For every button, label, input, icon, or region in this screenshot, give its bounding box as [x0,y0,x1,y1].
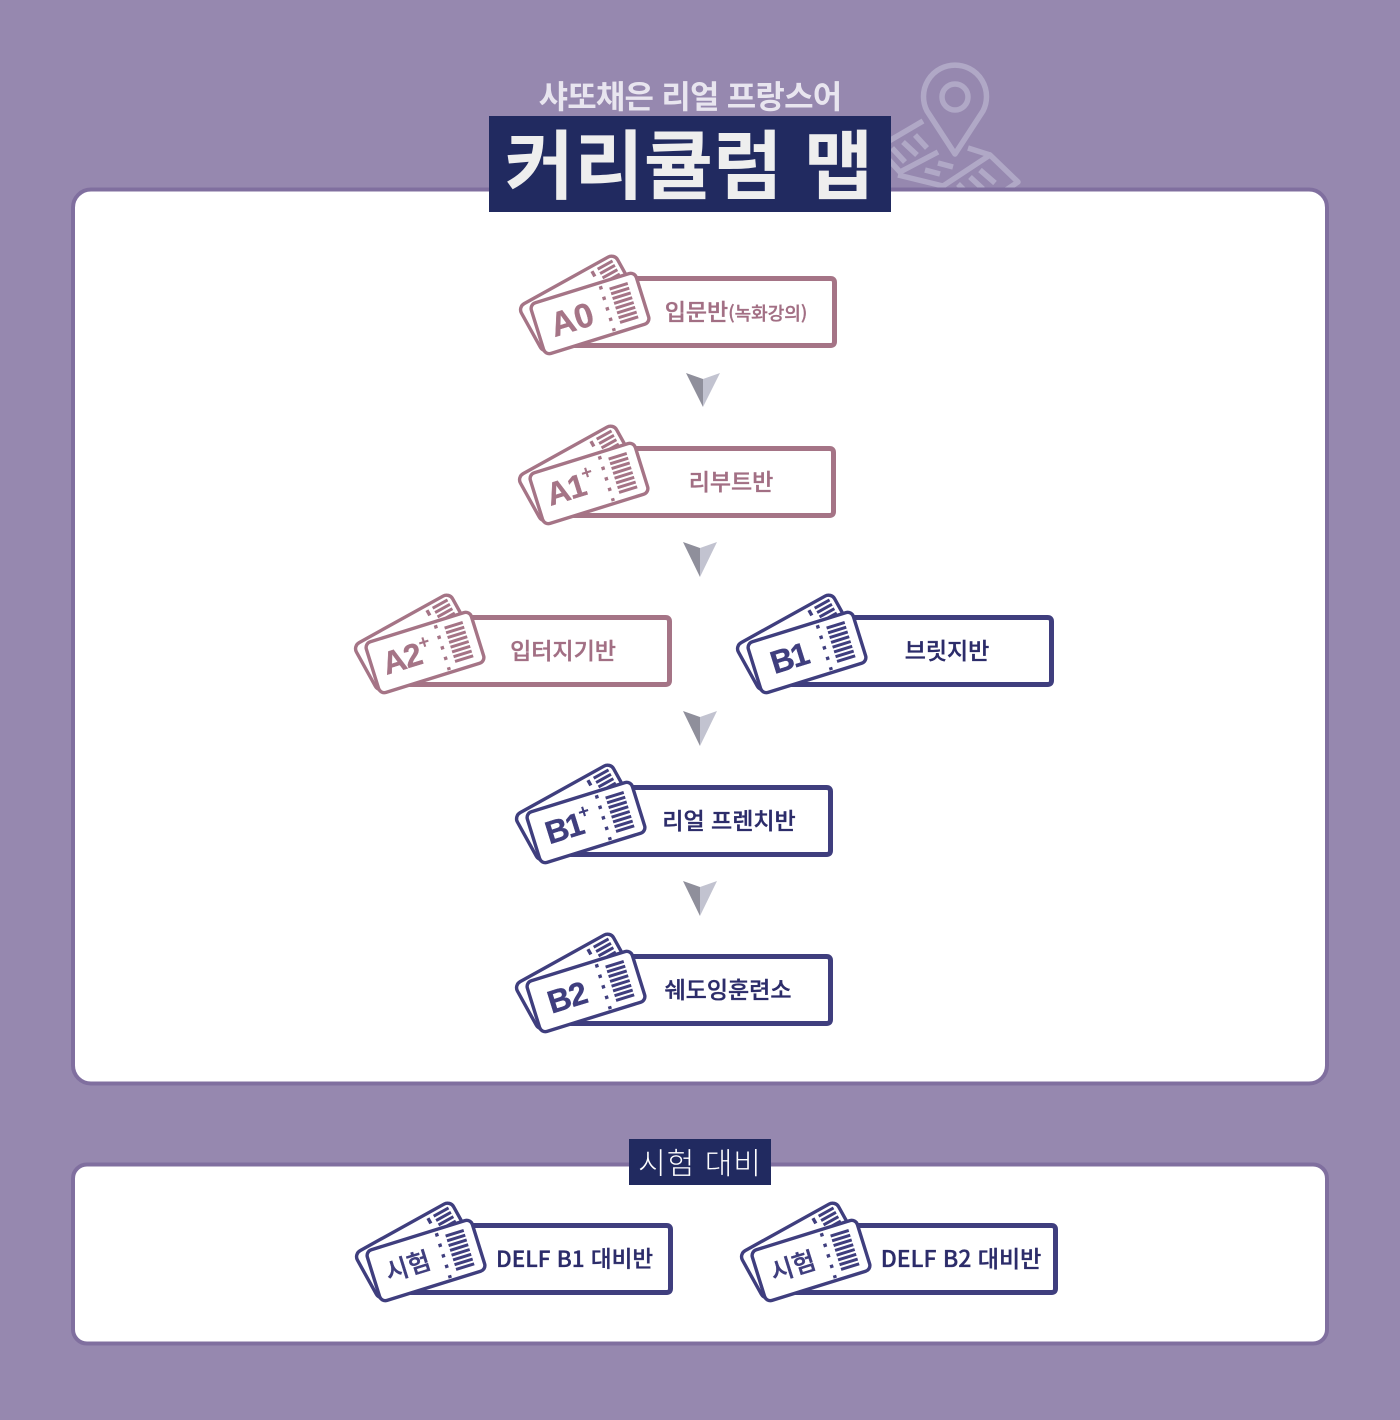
course DELF B1 [354,1201,670,1302]
arrow [686,373,720,407]
course A1+ [517,424,834,525]
course A1+: A1 [542,467,590,513]
course A0: 입문반(녹화강의) [665,293,807,327]
course A2+: + [416,631,433,655]
course B1+: B1 [541,805,588,851]
exam prep heading: 시험 대비 [638,1139,762,1183]
course B2: 쉐도잉훈련소 [665,971,791,1005]
icon: map with location pin [889,65,1018,192]
course A1+: 리부트반 [689,463,773,497]
course B2: B2 [543,974,591,1020]
course B1 [735,593,1052,694]
arrow [683,881,717,916]
title box: 커리큘럼 맵 [505,105,873,215]
panel: curriculum map [73,190,1327,1084]
course A0: A0 [546,296,599,345]
course DELF B2: DELF B2 대비반 [881,1240,1041,1274]
course A2+ [353,593,670,694]
course A1+: + [578,462,595,485]
course A2+: A2 [378,636,426,682]
panel: exam prep [73,1164,1327,1344]
course DELF B2 [739,1201,1056,1302]
arrow [683,711,717,746]
course A2+: 입터지기반 [510,632,616,666]
course B1+ [514,763,830,864]
course DELF B1: 시험 [380,1241,435,1289]
course A0 [518,254,834,355]
course B1+: 리얼 프렌치반 [662,802,796,836]
course B1: 브릿지반 [905,632,989,666]
course B2 [514,932,830,1033]
course B1: B1 [766,635,813,681]
arrow [683,542,717,577]
subtitle: 샤또채은 리얼 프랑스어 [539,72,841,118]
course DELF B2: 시험 [765,1241,820,1289]
course B1+: + [575,801,592,824]
course DELF B1: DELF B1 대비반 [496,1242,653,1274]
